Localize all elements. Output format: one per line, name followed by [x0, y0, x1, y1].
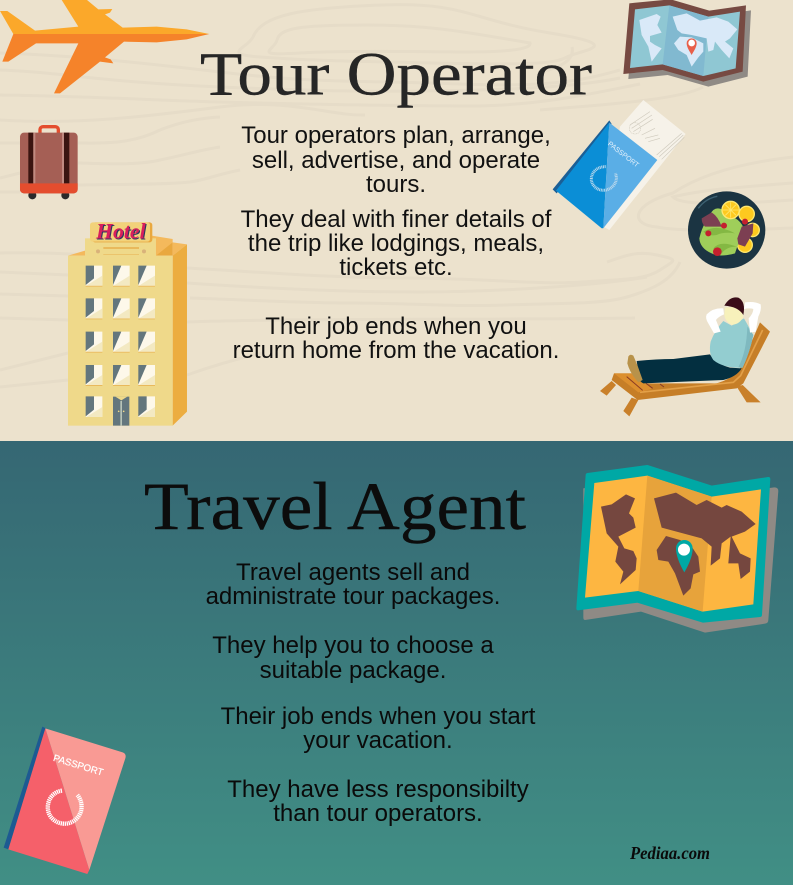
- text block: tour operator definition: Tour operators plan, arrange,: [241, 122, 551, 149]
- logo: Pediaa.com: Pediaa.com: [629, 843, 710, 863]
- text block: tour operator definition: tours.: [366, 171, 426, 198]
- text block: travel agent help: They help you to choose a: [212, 632, 494, 659]
- window pattern: [86, 285, 155, 288]
- icon: hotel building: Hotel: [96, 220, 148, 245]
- icon: hotel building: Hotel: [95, 219, 147, 244]
- title: Tour Operator: Tour Operator: [200, 42, 592, 108]
- text block: tour operator job end: Their job ends when you: [265, 313, 527, 340]
- icon: airplane: [0, 0, 209, 93]
- text block: travel agent responsibility: They have less responsibilty: [227, 776, 529, 803]
- text block: tour operator job end: return home from the vacation.: [233, 337, 559, 364]
- icon: pink passport: PASSPORT: [52, 753, 105, 779]
- icon: salad plate: [688, 191, 765, 269]
- icon: suitcase: [20, 127, 78, 199]
- icon: pink passport: [4, 727, 126, 874]
- text block: travel agent definition: Travel agents sell and: [236, 559, 470, 586]
- text block: tour operator details: the trip like lodgings, meals,: [248, 230, 544, 257]
- icon: man on lounger: [600, 297, 770, 416]
- icon: folded world map: [623, 0, 751, 87]
- text block: tour operator details: tickets etc.: [339, 254, 453, 281]
- panel: travel agent background: [0, 441, 793, 885]
- title: Travel Agent: Travel Agent: [144, 468, 526, 544]
- text block: travel agent responsibility: than tour operators.: [273, 800, 483, 827]
- icon: passport and ticket: [553, 100, 686, 230]
- text block: tour operator details: They deal with finer details of: [241, 206, 552, 233]
- icon: passport and ticket: PASSPORT: [606, 141, 640, 170]
- text block: travel agent help: suitable package.: [260, 657, 446, 684]
- text block: travel agent definition: administrate tour packages.: [206, 583, 500, 610]
- text block: travel agent job end: your vacation.: [303, 727, 453, 754]
- icon: hotel building: [68, 219, 187, 426]
- icon: large folded map: [578, 467, 778, 633]
- text block: tour operator definition: sell, advertise, and operate: [252, 147, 540, 174]
- panel: tour operator background: [0, 0, 793, 441]
- text block: travel agent job end: Their job ends when you start: [221, 703, 536, 730]
